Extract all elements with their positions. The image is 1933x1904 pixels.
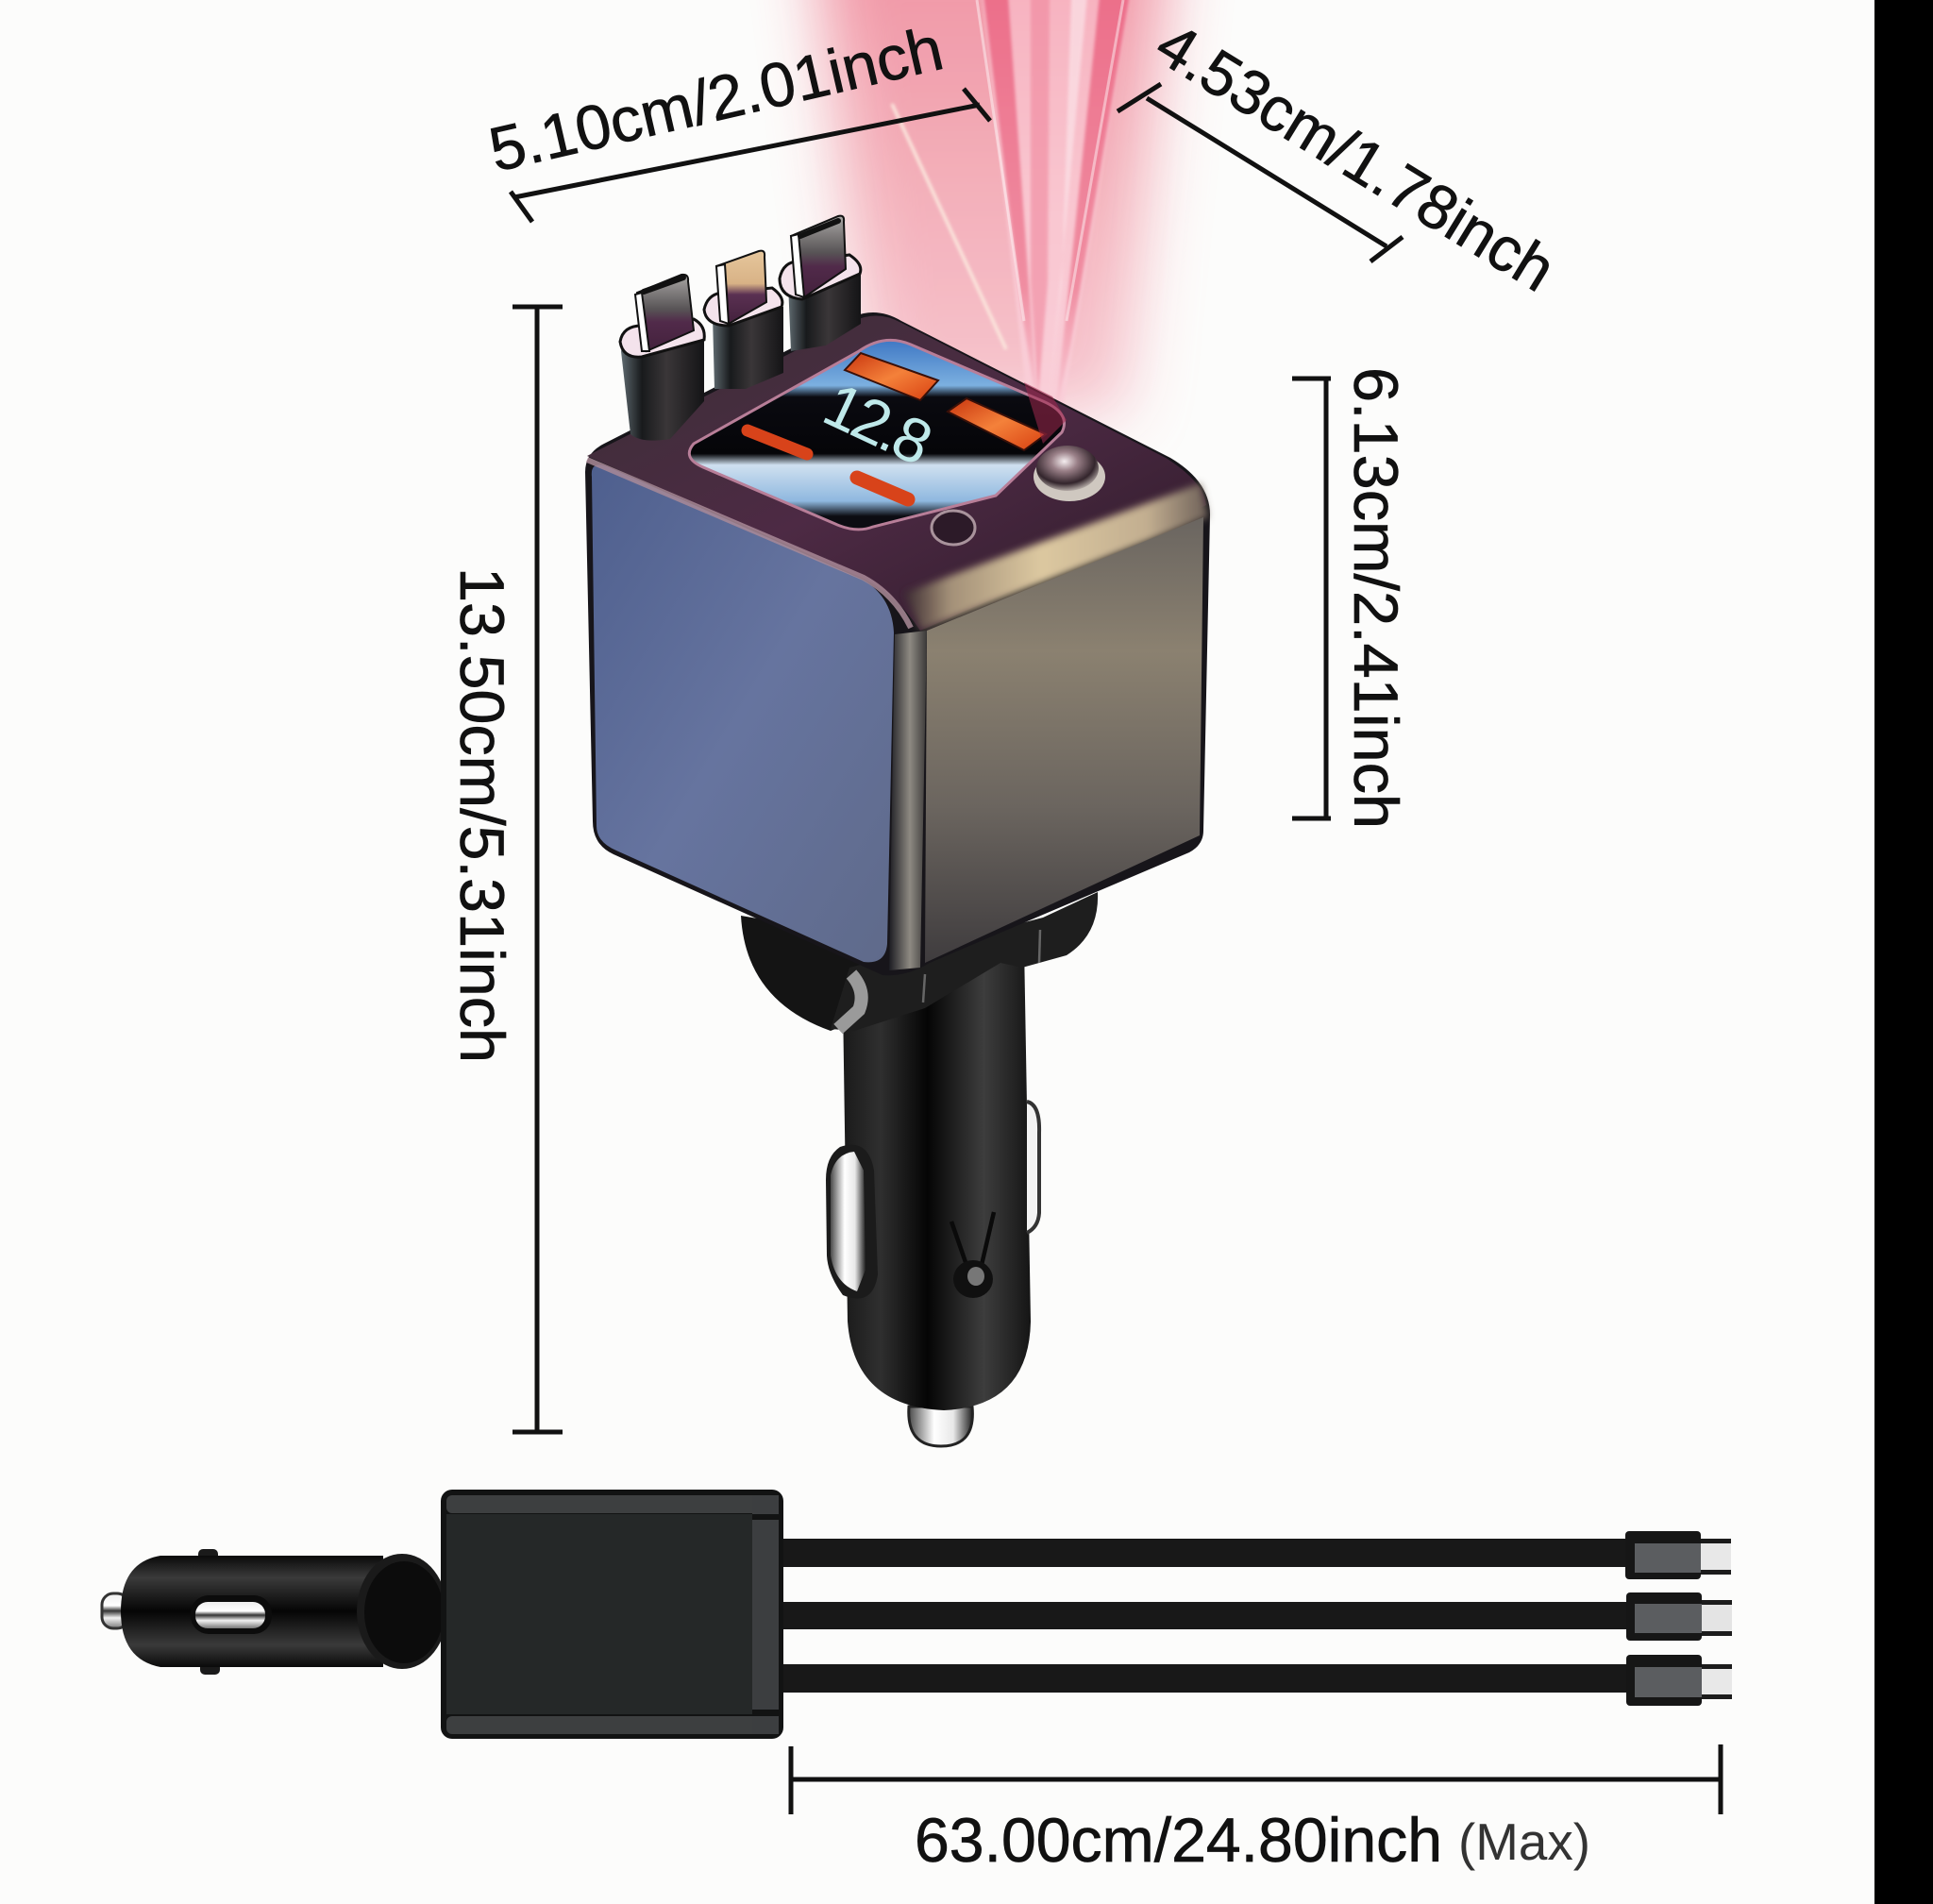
dimension: 63.00cm/24.80inch (Max): (Max) [1458, 1812, 1590, 1871]
USB-C port bottom [857, 478, 908, 499]
cream highlight band [904, 483, 1208, 631]
charger cube [585, 312, 1210, 975]
plug tip [102, 1593, 128, 1628]
cube silhouette [585, 312, 1210, 975]
dimension: 6.13cm/2.41inch: 6.13cm/2.41inch [1341, 367, 1411, 829]
car plug: upright view [741, 892, 1098, 1446]
metal clip [191, 1595, 272, 1634]
pink light beam [812, 0, 1170, 415]
dimension: 6.13cm/2.41inch [1292, 367, 1411, 829]
beam reflection on screen [1024, 382, 1067, 444]
front-left face [592, 465, 894, 962]
dimension: 63.00cm/24.80inch (Max): 63.00cm/24.80inch [915, 1805, 1442, 1875]
left spring clip [826, 1145, 878, 1299]
dimension: 4.53cm/1.78inch: 4.53cm/1.78inch [1145, 8, 1568, 305]
dimension: 13.50cm/5.31inch: 13.50cm/5.31inch [447, 567, 517, 1063]
dimension: 5.10cm/2.01inch: 5.10cm/2.01inch [483, 12, 950, 185]
flat charger: side view [102, 1490, 1732, 1739]
display screen [689, 340, 1067, 530]
right spring clip [1027, 1102, 1039, 1233]
small button [932, 511, 975, 545]
front-right face [925, 517, 1203, 963]
plug body [121, 1556, 383, 1667]
lower nub [200, 1661, 220, 1675]
chrome button [1034, 446, 1105, 501]
connector 2 [704, 251, 783, 389]
top face [587, 315, 1206, 631]
LED readout: 12.8 [814, 369, 940, 478]
hinge band [831, 892, 1098, 1031]
cable 1 [783, 1531, 1731, 1579]
USB-A port right [948, 398, 1046, 450]
black side bar [1874, 0, 1933, 1904]
dimension: 63.00cm/24.80inch (Max) [790, 1744, 1721, 1875]
tip [909, 1407, 972, 1446]
hinge seams [923, 930, 1040, 1003]
pink edge highlight [587, 460, 911, 628]
USB-A port top [845, 353, 938, 400]
dimension: 13.50cm/5.31inch [447, 306, 563, 1433]
cable 3 [783, 1655, 1732, 1706]
ground logo [951, 1212, 994, 1298]
grip body [843, 944, 1031, 1410]
retractable connectors [620, 216, 861, 441]
silver joint [838, 974, 862, 1029]
connector 1 [620, 275, 704, 441]
connector 3 [780, 216, 861, 351]
upper nub [198, 1549, 218, 1562]
control box [441, 1490, 783, 1739]
cable 2 [783, 1592, 1732, 1641]
rotating collar [741, 916, 906, 1031]
USB-C port left [748, 430, 807, 454]
corner edge [889, 631, 927, 970]
swivel disc [357, 1554, 447, 1669]
